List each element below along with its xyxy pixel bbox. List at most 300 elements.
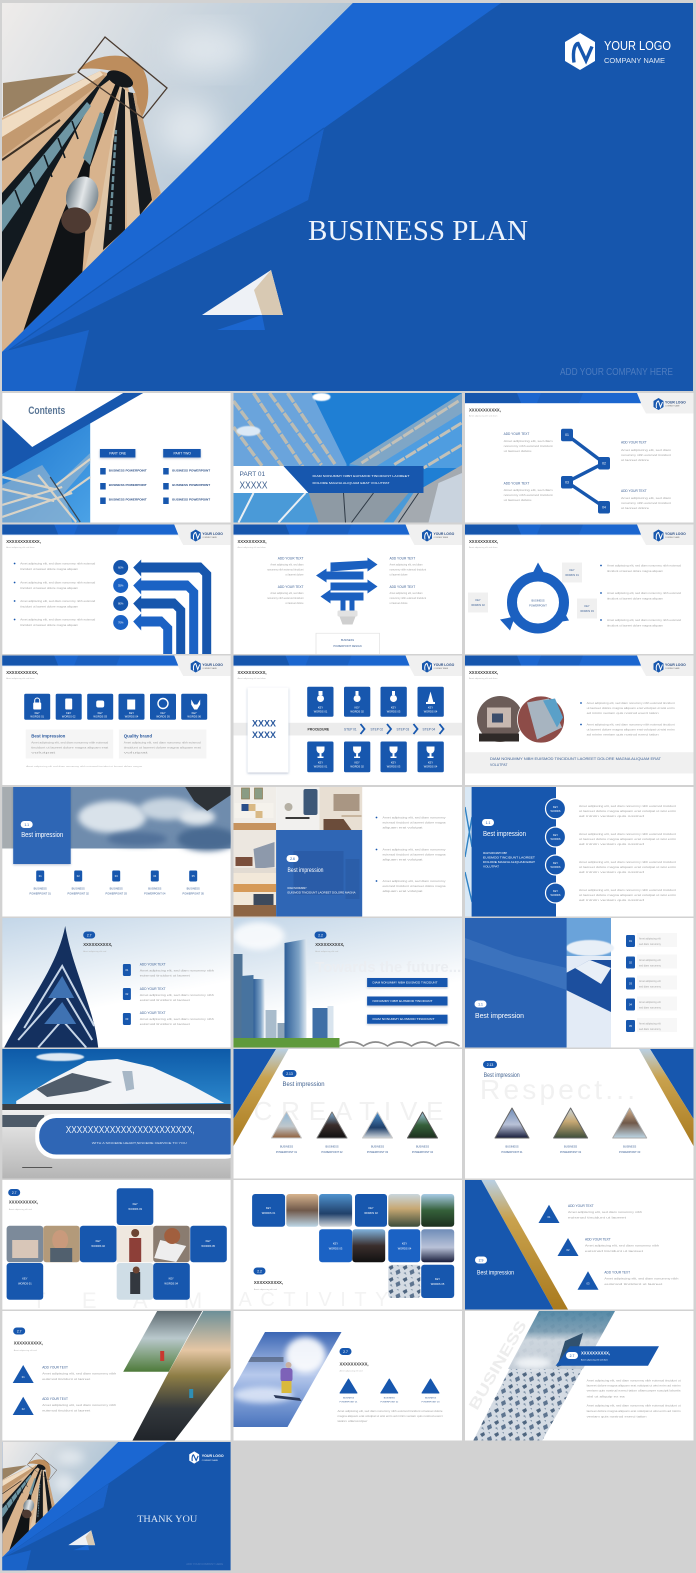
- five numbered items: POWERPOINT 04: [144, 892, 166, 896]
- right text blocks: ut laoreet dolore: [390, 602, 408, 605]
- triangle items: Amet adipiscing elit, sed diam nonummy nibh: [42, 1372, 117, 1376]
- circle photo: room: [477, 696, 523, 742]
- left text blocks: nonummy nibh euismod tincidunt: [504, 445, 553, 448]
- numbered list: 01: [125, 968, 129, 972]
- key word tiles: KEY: [435, 1277, 440, 1281]
- key word boxes: KEY: [569, 568, 575, 572]
- slide heading: [254, 1268, 283, 1291]
- cover artwork small: [2, 1442, 231, 1570]
- part two column: [163, 449, 211, 504]
- upper medal tiles: [307, 687, 444, 717]
- logo mark: [565, 33, 595, 70]
- blue title banner: [556, 1346, 659, 1366]
- step labels and chevrons: PROCEDURE: [308, 728, 330, 732]
- slide header: [2, 524, 231, 549]
- upper medal tiles: KEY: [428, 706, 433, 710]
- numbered list: ADD YOUR TEXT: [140, 987, 166, 991]
- triangle photos: [495, 1108, 647, 1138]
- key word circles: KEY: [553, 833, 558, 837]
- bullet paragraphs: euismod tincidunt ut laoreet dolore magna: [382, 854, 446, 856]
- slide heading: Amet adipiscing elit sed: [315, 950, 339, 953]
- cycle centre label: POWERPOINT: [529, 604, 547, 608]
- five numbered items: BUSINESS: [72, 886, 85, 890]
- slide heading: 2.13: [487, 1063, 493, 1067]
- bullet paragraphs: aliquam erat volutpat: [382, 858, 423, 862]
- bullet text list: tincidunt ut laoreet dolore magna aliquam: [20, 606, 78, 608]
- triangle items: 01: [22, 1375, 25, 1379]
- left text blocks: [267, 556, 304, 605]
- triangle photos: [272, 1112, 438, 1138]
- quality brand card: Amet adipiscing elit, sed diam nonummy nibh euismod: [124, 742, 201, 744]
- numbered list: 02: [125, 992, 129, 996]
- lower trophy tiles: WORDS 02: [350, 764, 364, 768]
- bulb base: [338, 610, 358, 624]
- blue panel: Best impression: [483, 831, 526, 838]
- left text blocks: ut laoreet dolore: [504, 499, 533, 502]
- heading: Contents: Contents: [28, 405, 65, 417]
- five numbered items: BUSINESS: [187, 886, 200, 890]
- key word circles: KEY: [553, 861, 558, 865]
- triangle items: ADD YOUR TEXT: [585, 1238, 611, 1242]
- slide heading: Amet adipiscing elit sed: [83, 950, 107, 953]
- key word tiles: [7, 1188, 227, 1300]
- lower trophy tiles: KEY: [354, 760, 360, 764]
- numbered list: sed diam nonummy: [639, 943, 662, 946]
- blue panel: Best impression: [21, 832, 63, 839]
- slide header: XXXXXXXXXXX,: [6, 670, 38, 675]
- node squares: 04: [602, 506, 606, 510]
- panel: contents slide: [2, 393, 230, 522]
- key word tiles: KEY: [133, 1202, 138, 1206]
- triangle labels: BUSINESS: [623, 1144, 637, 1148]
- bullet paragraphs: Amet adipiscing elit, sed diam nonummy: [382, 816, 447, 820]
- part two column: BUSINESS POWERPOINT: [172, 483, 211, 487]
- upper medal tiles: KEY: [354, 706, 360, 710]
- best impression card: tincidunt ut laoreet dolore magna aliquam erat: [31, 746, 109, 750]
- slide header: Amet adipiscing elit sed diam: [469, 677, 498, 680]
- glass strip photo: [465, 787, 472, 916]
- icon tiles row: WORDS 01: [30, 714, 45, 718]
- right paragraphs: ut laoreet dolore magna aliquam erat volutpat ut wisi enim: [579, 894, 676, 897]
- body paragraphs: laoreet dolore magna aliquam erat volutpat ut wisi enim ad minim: [587, 1385, 681, 1388]
- key word boxes: KEY: [475, 598, 481, 602]
- body paragraphs: Amet adipiscing elit, sed diam nonummy nibh euismod tincidunt ut: [587, 1380, 681, 1383]
- panel: towers slide: [234, 918, 462, 1048]
- blue panel: 1.1: [478, 1002, 483, 1006]
- blue text banner: [284, 466, 424, 493]
- bullet text list: Amet adipiscing elit, sed diam nonummy nibh euismod: [20, 600, 96, 603]
- bullet paragraphs: aliquam erat volutpat: [382, 890, 423, 893]
- photo collage: [234, 787, 362, 916]
- triangle labels: POWERPOINT 03: [619, 1150, 641, 1154]
- hiker photo upper: [123, 1311, 202, 1372]
- bullet text list: tincidunt ut laoreet dolore magna aliquam: [607, 570, 663, 573]
- slide heading: XXXXXXXXXX,: [254, 1280, 283, 1285]
- slide heading: [13, 1328, 43, 1352]
- slide header: COMPANY NAME: [665, 667, 680, 670]
- numbered list: 03: [629, 982, 632, 986]
- panel: mountain tiles slide: [234, 1180, 462, 1311]
- right text blocks: ADD YOUR TEXT: [390, 556, 415, 560]
- key word tiles: WORDS 01: [18, 1282, 32, 1286]
- bullet paragraphs: Amet adipiscing elit, sed diam nonummy nibh euismod tincidunt: [587, 724, 675, 726]
- five numbered items: BUSINESS: [148, 886, 162, 890]
- upper medal tiles: KEY: [391, 706, 396, 710]
- triangle labels: POWERPOINT 03: [367, 1150, 389, 1154]
- five numbered items: 02: [77, 874, 80, 878]
- right text blocks: ut laoreet dolore: [621, 459, 650, 462]
- step labels and chevrons: STEP 03: [396, 728, 409, 732]
- slide heading: [282, 1070, 324, 1088]
- icon tiles row: KEY: [98, 711, 103, 715]
- key word circles: [546, 799, 566, 903]
- numbered list: 02: [629, 960, 632, 964]
- panel: signpost bulb slide: [234, 524, 462, 654]
- bullet paragraphs: [376, 816, 447, 893]
- key word tiles: WORDS 04: [164, 1282, 179, 1286]
- blue title banner: XXXXXXXXXX,: [581, 1350, 610, 1356]
- right text blocks: [621, 440, 671, 510]
- thank you heading: THANK YOU: [137, 1515, 197, 1525]
- right text blocks: nonummy nibh euismod tincidunt: [621, 502, 671, 505]
- bullet paragraphs: Amet adipiscing elit, sed diam nonummy: [382, 880, 447, 883]
- key word tiles: KEY: [22, 1276, 28, 1280]
- triangle labels: [276, 1144, 434, 1154]
- blue panel: [13, 787, 71, 864]
- body paragraph: Amet adipiscing elit, sed diam nonummy nibh euismod tincidunt ut laoreet dolore: [338, 1410, 443, 1413]
- faded word TEAM: TEAM: [32, 1288, 202, 1313]
- design label box: POWERPOINT DESIGN: [333, 644, 362, 648]
- title: BUSINESS PLAN: [308, 215, 528, 247]
- small logo: YOUR LOGO: [202, 1454, 224, 1458]
- triangle labels: BUSINESS: [325, 1144, 339, 1148]
- triangle items: ADD YOUR TEXT: [42, 1397, 68, 1401]
- panel: creative triangles slide: [234, 1049, 462, 1178]
- part one column: BUSINESS POWERPOINT: [109, 498, 147, 502]
- numbered list: euismod tincidunt ut laoreet: [140, 1023, 190, 1026]
- step labels and chevrons: STEP 02: [370, 728, 383, 732]
- bullet paragraphs: ad minim veniam quis nostrud exerci tation: [587, 734, 660, 736]
- bullet text list: Amet adipiscing elit, sed diam nonummy nibh euismod: [607, 564, 682, 568]
- bullet text list: Amet adipiscing elit, sed diam nonummy nibh euismod: [607, 592, 682, 595]
- quality brand card: volutpat: [124, 752, 149, 754]
- numbered list: 05: [629, 1024, 632, 1028]
- mountain photo strip: [566, 918, 614, 1048]
- slide heading: [83, 932, 112, 953]
- faded headline: Towards the future...: [315, 959, 461, 976]
- bullet paragraphs: euismod tincidunt ut laoreet dolore magna: [382, 885, 446, 888]
- quality brand card: Quality brand: [124, 734, 152, 738]
- body paragraph: [338, 1410, 443, 1423]
- five numbered items: POWERPOINT 05: [183, 892, 204, 896]
- key word tiles: KEY: [206, 1239, 211, 1243]
- slide header: XXXXXXXXXXX,: [469, 408, 501, 412]
- five numbered items: POWERPOINT 01: [30, 892, 51, 896]
- slide header: COMPANY NAME: [665, 536, 680, 539]
- five numbered items: [30, 870, 204, 896]
- three triangles: [340, 1379, 440, 1404]
- logo text: COMPANY NAME: [604, 56, 665, 65]
- panel: skier slide: [234, 1311, 462, 1440]
- mountain photo: [2, 1049, 231, 1178]
- slide heading: Amet adipiscing elit sed: [340, 1370, 363, 1372]
- slide heading: [314, 932, 344, 953]
- numbered list: Amet adipiscing elit, sed diam nonummy nibh: [140, 1018, 215, 1021]
- slide header: COMPANY NAME: [434, 536, 449, 539]
- upper medal tiles: WORDS 02: [350, 710, 364, 714]
- collage label: EUISMOD TINCIDUNT LAOREET DOLORE MAGNA: [288, 892, 356, 894]
- slide heading: XXXXXXXXXX,: [9, 1200, 38, 1204]
- step labels and chevrons: STEP 01: [344, 728, 357, 732]
- icon tiles row: WORDS 04: [125, 714, 139, 718]
- part one column: BUSINESS POWERPOINT: [109, 469, 147, 473]
- triangle labels: BUSINESS: [416, 1144, 429, 1148]
- bullet paragraphs: aliquam erat volutpat: [382, 826, 423, 830]
- bullet text list: tincidunt ut laoreet dolore magna aliquam: [20, 587, 78, 590]
- slide heading: 2.2: [318, 933, 323, 937]
- right paragraphs: ad minim veniam quis nostrud: [579, 843, 645, 846]
- panel: snowy mountain banner slide: [2, 1049, 231, 1178]
- key word tiles: KEY: [96, 1239, 101, 1243]
- icon tiles row: KEY: [160, 711, 166, 715]
- part one column: [100, 449, 147, 504]
- slide header: COMPANY NAME: [202, 536, 218, 539]
- percent circles: 55%: [118, 584, 124, 588]
- left text blocks: ADD YOUR TEXT: [504, 482, 529, 486]
- pointed building photo: [4, 926, 98, 1048]
- triangle items: 01: [548, 1215, 551, 1219]
- slide header: YOUR LOGO: [202, 663, 223, 667]
- key word tiles: WORDS 03: [329, 1246, 343, 1250]
- slide header: [465, 656, 694, 680]
- icon tiles row: WORDS 02: [62, 714, 76, 718]
- blue panel: Best impression: [475, 1013, 524, 1020]
- procedure band: [234, 723, 462, 736]
- three buttons: NONUMMY NIBH EUISMOD TINCIDUNT: [372, 1000, 433, 1003]
- XXXX card: [248, 688, 288, 772]
- slide heading: [483, 1061, 520, 1079]
- right text blocks: ADD YOUR TEXT: [621, 440, 647, 444]
- icon tiles row: KEY: [192, 711, 197, 715]
- slide heading: XXXXXXXXXX,: [340, 1362, 369, 1366]
- best impression card: volutpat: [31, 752, 56, 754]
- bullet text list: Amet adipiscing elit, sed diam nonummy nibh euismod: [607, 619, 682, 622]
- triangle items: Amet adipiscing elit, sed diam nonummy nibh: [42, 1404, 117, 1407]
- key word tiles: WORDS 02: [91, 1244, 106, 1248]
- blue panel: 1.1: [24, 823, 29, 827]
- blue slanted panel: 2.9: [479, 1258, 483, 1262]
- blue rounded banner: [35, 1114, 245, 1159]
- icon tiles row: KEY: [66, 711, 72, 715]
- panel: snow mountain split slide: [465, 918, 694, 1048]
- blue panel: [465, 918, 567, 1048]
- slide header: Amet adipiscing elit sed diam: [238, 677, 266, 680]
- white label block: PART 01: [240, 471, 266, 478]
- slide header: YOUR LOGO: [665, 663, 686, 667]
- triangle items: ADD YOUR TEXT: [568, 1204, 594, 1208]
- small logo: [189, 1451, 224, 1464]
- key word tiles: WORDS 05: [201, 1244, 216, 1248]
- right text blocks: Amet adipiscing elit, sed diam: [390, 592, 423, 595]
- slide header: [2, 656, 231, 680]
- cover artwork: tower photo and blue folds: [2, 3, 693, 391]
- panel: slanted triangles slide: [465, 1180, 694, 1310]
- small logo: COMPANY NAME: [202, 1459, 219, 1462]
- key word tiles: KEY: [402, 1242, 407, 1246]
- key word boxes: WORDS 02: [471, 603, 485, 607]
- slide heading: XXXXXXXXXX,: [14, 1340, 43, 1346]
- collage label: [286, 855, 356, 894]
- triangle items: 02: [567, 1248, 570, 1252]
- panel: hikers slide: [2, 1311, 231, 1440]
- XXXX card: XXXX: [252, 730, 276, 740]
- triangle items: 02: [22, 1407, 25, 1411]
- slide heading: Best impression: [282, 1082, 324, 1088]
- panel: cover slide: [2, 3, 693, 391]
- bullet text list: tincidunt ut laoreet dolore magna aliquam: [607, 624, 663, 628]
- lower trophy tiles: WORDS 04: [424, 764, 438, 768]
- three triangles: BUSINESS: [425, 1398, 437, 1400]
- bullet text list: Amet adipiscing elit, sed diam nonummy nibh euismod: [20, 618, 96, 622]
- slide heading: 2.13: [286, 1072, 293, 1076]
- slide header: XXXXXXXXXX,: [238, 539, 267, 544]
- blue panel: DIAM NONUMMY NIBH: [483, 852, 507, 855]
- step labels and chevrons: [308, 724, 444, 734]
- slide heading: [340, 1348, 369, 1372]
- panel: icon tiles slide: [2, 656, 231, 785]
- left text blocks: [504, 432, 553, 502]
- slide header: [234, 656, 462, 680]
- faded word CREATIVE: CREATIVE: [254, 1096, 444, 1126]
- part two column: BUSINESS POWERPOINT: [172, 498, 211, 502]
- numbered list: sed diam nonummy: [639, 964, 662, 968]
- numbered list: Amet adipiscing elit: [639, 1001, 661, 1004]
- triangle items: euismod tincidunt ut laoreet: [604, 1283, 663, 1286]
- slide header: Amet adipiscing elit sed diam: [6, 677, 35, 680]
- panel: cycle diagram slide: [465, 524, 694, 654]
- bullet paragraphs: ut laoreet dolore magna aliquam erat volutpat ut wisi enim: [587, 707, 675, 710]
- slide heading: XXXXXXXXXX,: [83, 942, 112, 947]
- key word tiles: WORDS 05: [431, 1282, 445, 1286]
- right paragraphs: ut laoreet dolore magna aliquam erat volutpat ut wisi enim: [579, 838, 676, 841]
- key word circles: WORDS: [551, 893, 561, 897]
- key word circles: KEY: [553, 805, 558, 809]
- faded word BUSINESS: BUSINESS: [466, 1318, 530, 1413]
- icon tiles row: KEY: [129, 711, 134, 715]
- right text blocks: ADD YOUR TEXT: [390, 585, 415, 589]
- numbered list: Amet adipiscing elit, sed diam nonummy nibh: [140, 970, 215, 972]
- slide header: XXXXXXXXXX,: [238, 670, 267, 675]
- icon tiles row: WORDS 05: [156, 714, 170, 718]
- part one column: PART ONE: [109, 452, 127, 456]
- key word tiles: [252, 1194, 454, 1298]
- blue panel: DOLORE MAGNA ALIQUAM ERAT: [483, 861, 536, 864]
- key word boxes: WORDS 03: [580, 609, 594, 613]
- triangle items: 03: [587, 1282, 590, 1286]
- left text blocks: nonummy nibh euismod tincidunt: [267, 597, 304, 600]
- right paragraphs: ad minim veniam quis nostrud: [579, 871, 645, 874]
- three triangles: BUSINESS: [343, 1398, 355, 1400]
- numbered list: euismod tincidunt ut laoreet: [140, 974, 190, 978]
- cycle centre label: [529, 598, 547, 608]
- circle photo: laptop: [518, 696, 564, 743]
- numbered list: ADD YOUR TEXT: [140, 1011, 166, 1015]
- three triangles: POWERPOINT 03: [422, 1402, 440, 1404]
- percent circles: 70%: [118, 620, 124, 624]
- numbered list: 01: [629, 939, 632, 943]
- right text blocks: Amet adipiscing elit, sed diam: [621, 497, 671, 500]
- key word tiles: WORDS 02: [364, 1211, 378, 1215]
- lower trophy tiles: [307, 742, 444, 772]
- five numbered items: POWERPOINT 02: [68, 892, 89, 896]
- body paragraphs: Amet adipiscing elit, sed diam nonummy nibh euismod tincidunt ut: [587, 1405, 681, 1408]
- left text blocks: ADD YOUR TEXT: [278, 556, 304, 560]
- bullet paragraphs: [580, 702, 675, 736]
- white label block: [234, 466, 308, 493]
- part two column: PART TWO: [173, 452, 191, 456]
- key word circles: WORDS: [551, 865, 561, 869]
- three buttons: [367, 978, 448, 1024]
- blue slanted panel: [465, 1180, 554, 1310]
- slide header: Amet adipiscing elit sed diam: [6, 546, 35, 549]
- five numbered items: 03: [115, 874, 118, 878]
- percent circles: [113, 560, 128, 630]
- triangle labels: BUSINESS: [505, 1144, 519, 1148]
- best impression card: Best impression: [31, 734, 66, 738]
- icon tiles row: WORDS 06: [187, 714, 202, 718]
- panel: thank you slide: [2, 1442, 231, 1570]
- footnote: Amet adipiscing elit sed diam nonummy nibh euismod tincidunt ut laoreet dolore magna: [26, 765, 143, 768]
- earth clouds photo: [2, 787, 237, 851]
- triangle labels: BUSINESS: [564, 1144, 577, 1148]
- right paragraphs: Amet adipiscing elit, sed diam nonummy nibh euismod tincidunt: [579, 805, 676, 808]
- slide header: YOUR LOGO: [665, 400, 686, 404]
- design label box: BUSINESS: [341, 638, 354, 642]
- panel: rock face slide: [465, 1311, 694, 1440]
- grey text band: DIAM NONUMMY NIBH EUISMOD TINCIDUNT LAOREET DOLORE MAGNA ALIQUAM ERAT: [490, 757, 661, 761]
- blue panel: EUISMOD TINCIDUNT LAOREET: [483, 856, 536, 860]
- icon tiles row: KEY: [35, 711, 40, 715]
- nested L arrows: [133, 560, 211, 654]
- grey text band: VOLUTPAT: [490, 763, 507, 767]
- key word tiles: WORDS 04: [398, 1246, 412, 1250]
- key word boxes: KEY: [584, 604, 590, 608]
- numbered list: ADD YOUR TEXT: [140, 963, 166, 967]
- slide header: [234, 524, 462, 549]
- numbered list: Amet adipiscing elit, sed diam nonummy nibh: [140, 994, 215, 997]
- numbered list: sed diam nonummy: [639, 1006, 662, 1010]
- right paragraphs: Amet adipiscing elit, sed diam nonummy nibh euismod tincidunt: [579, 833, 676, 836]
- three buttons: DIAM NONUMMY NIBH EUISMOD TINCIDUNT: [372, 981, 438, 984]
- bullet text list: tincidunt ut laoreet dolore magna aliquam: [20, 624, 78, 627]
- slide heading: Amet adipiscing elit sed: [9, 1208, 33, 1211]
- slide heading: XXXXXXXXXX,: [315, 942, 344, 947]
- bullet paragraphs: Amet adipiscing elit, sed diam nonummy nibh euismod tincidunt: [587, 702, 675, 705]
- panel: collage slide: [234, 787, 462, 916]
- right text blocks: nonummy nibh euismod tincidunt: [621, 454, 671, 457]
- pale sky: [2, 918, 231, 1048]
- slide heading: Amet adipiscing elit sed: [14, 1349, 37, 1352]
- lower trophy tiles: KEY: [318, 760, 323, 764]
- right text blocks: nonummy nibh euismod tincidunt: [390, 568, 426, 572]
- node squares: 02: [602, 462, 606, 466]
- bullet text list: tincidunt ut laoreet dolore magna aliquam: [20, 568, 78, 571]
- key word tiles: KEY: [333, 1242, 338, 1246]
- triangle items: [538, 1204, 679, 1290]
- footer company text: ADD YOUR COMPANY HERE: [186, 1562, 223, 1566]
- triangle items: euismod tincidunt ut laoreet: [42, 1378, 91, 1381]
- slide header: YOUR LOGO: [665, 532, 686, 536]
